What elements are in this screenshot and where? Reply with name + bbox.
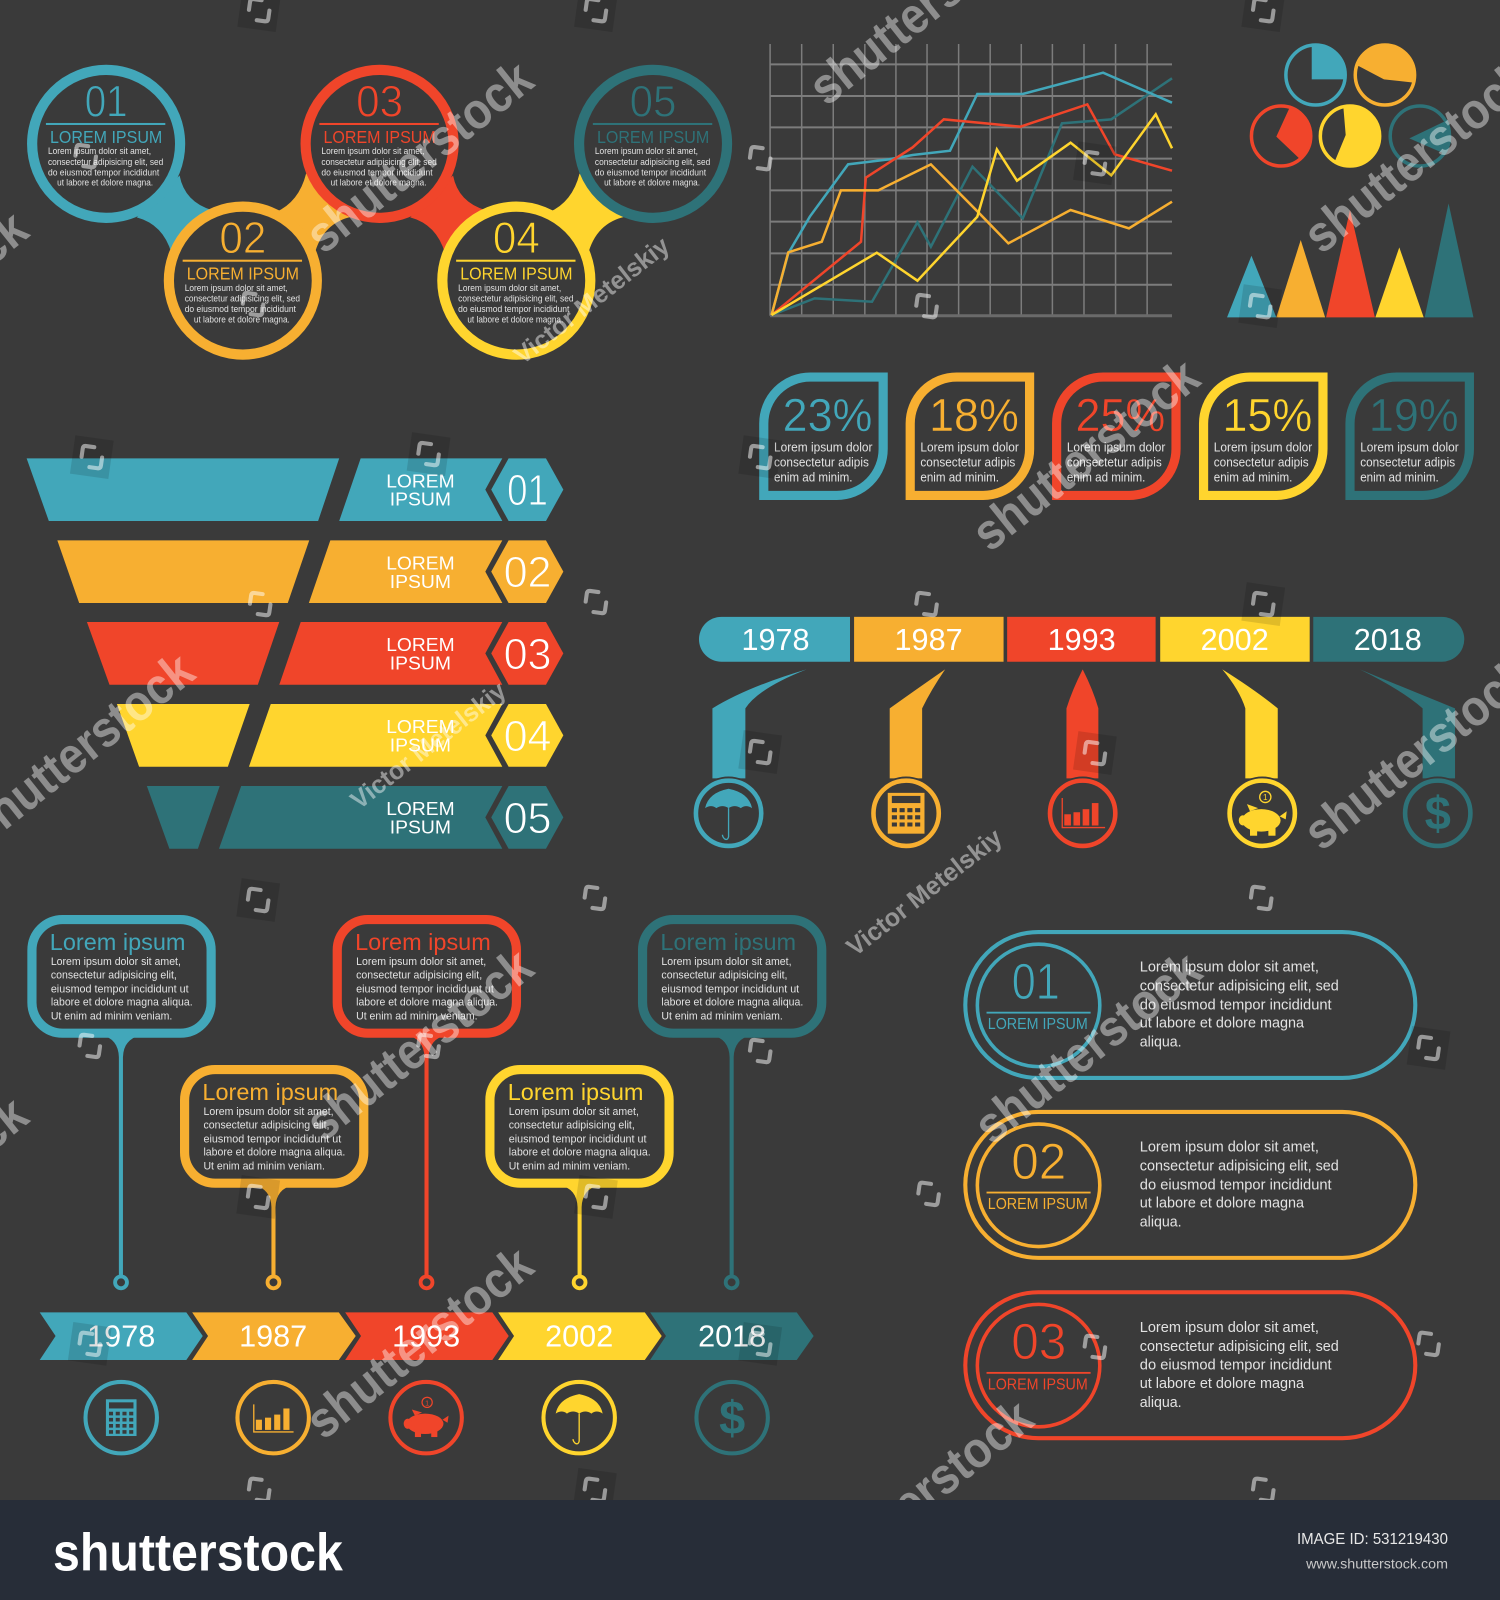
callout 3: consectetur adipisicing elit, (356, 970, 482, 982)
callout 3: labore et dolore magna aliqua. (356, 997, 498, 1009)
circle 05: consectetur adipisicing elit, sed (595, 157, 710, 167)
icon: calculator (86, 1382, 157, 1453)
leaf 23%: enim ad minim. (774, 470, 853, 485)
icon: umbrella (543, 1382, 615, 1453)
funnel row 05: 05 (504, 794, 552, 843)
circle 04 (442, 207, 590, 355)
circle 05 (579, 70, 727, 218)
callout 5: consectetur adipisicing elit, (661, 970, 787, 982)
leaf 19% (1350, 377, 1469, 495)
panel: year bar timeline (692, 617, 1474, 850)
leaf 25%: 25% (1076, 389, 1165, 441)
icon: umbrella (692, 777, 765, 850)
chevron years: 1978 (87, 1320, 155, 1354)
circle 02: 02 (219, 212, 266, 263)
callout 2: Lorem ipsum dolor sit amet, (203, 1106, 334, 1118)
icon: dollar: $ (1425, 788, 1451, 840)
year bar: 1993 (1048, 623, 1116, 657)
pie: teal (1286, 45, 1346, 105)
series: red (772, 104, 1172, 315)
connector: teal blob (137, 176, 212, 253)
circle 02: LOREM IPSUM (187, 264, 299, 284)
pill 02: 02 (1011, 1133, 1066, 1190)
year bar: 2002 (1201, 623, 1269, 657)
icon: dollar (696, 1382, 768, 1453)
callout 1: Ut enim ad minim veniam. (51, 1010, 172, 1022)
year bar: 1987 (895, 623, 963, 657)
pill 03: consectetur adipisicing elit, sed (1140, 1339, 1339, 1355)
callout 1: eiusmod tempor incididunt ut (51, 983, 189, 995)
triangle chart (1227, 203, 1473, 317)
icon: piggy bank (1226, 777, 1299, 850)
watermark text: shutterstock (795, 1388, 1044, 1600)
funnel row 01: IPSUM (390, 489, 451, 510)
circle 04: do eiusmod tempor incididunt (458, 304, 570, 314)
chevron years: 1993 (392, 1320, 460, 1354)
leaf 15%: enim ad minim. (1214, 470, 1292, 485)
circle 05: 05 (630, 75, 677, 126)
callout 4: Ut enim ad minim veniam. (509, 1160, 630, 1172)
icon: calculator (869, 777, 943, 850)
watermark text: shutterstock (961, 347, 1210, 562)
callout 1 (32, 920, 211, 1288)
arrows (712, 669, 1455, 778)
callout 4: consectetur adipisicing elit, (509, 1120, 635, 1132)
chevron years: 2018 (698, 1320, 766, 1354)
circle 02: Lorem ipsum dolor sit amet, (185, 283, 288, 293)
leaf 25%: enim ad minim. (1067, 470, 1145, 485)
leaf 18%: 18% (929, 389, 1019, 441)
circle 01: ut labore et dolore magna. (57, 178, 153, 188)
watermark text: Victor Metelskiy (509, 231, 676, 370)
circle 05: do eiusmod tempor incididunt (595, 168, 707, 178)
pie: dark teal (1390, 106, 1451, 166)
callout 5: Lorem ipsum dolor sit amet, (661, 956, 792, 968)
circle 02 (169, 207, 317, 355)
circle 04: 04 (493, 212, 540, 263)
leaf 19%: consectetur adipis (1360, 455, 1455, 470)
leaf 18% (910, 377, 1030, 495)
series: yellow (772, 114, 1172, 315)
callout 1: consectetur adipisicing elit, (51, 970, 177, 982)
funnel row 03 (87, 622, 563, 685)
circle 02: do eiusmod tempor incididunt (185, 304, 296, 314)
circle 03: do eiusmod tempor incididunt (321, 168, 433, 178)
chevrons (40, 1312, 814, 1360)
leaf 18%: enim ad minim. (920, 470, 999, 485)
line chart (770, 44, 1172, 316)
pill 03: ut labore et dolore magna (1140, 1376, 1305, 1392)
callout 5 (643, 920, 822, 1288)
callout 1: Lorem ipsum dolor sit amet, (51, 956, 181, 968)
leaf 25%: Lorem ipsum dolor (1067, 440, 1166, 455)
callout 2: consectetur adipisicing elit, (203, 1120, 329, 1132)
pie charts (1251, 44, 1451, 166)
watermark text: shutterstock (295, 937, 544, 1151)
pill 03: 03 (1011, 1313, 1066, 1370)
series: teal (772, 73, 1172, 315)
callout 2: Lorem ipsum (202, 1079, 338, 1105)
icon: piggy bank (390, 1382, 462, 1453)
chevron years (87, 1320, 766, 1354)
circle 05: ut labore et dolore magna. (604, 178, 700, 188)
leaf 18%: consectetur adipis (920, 455, 1015, 470)
pill 01 (965, 932, 1415, 1078)
leaf 19%: enim ad minim. (1360, 470, 1439, 485)
watermark text: shutterstock (963, 940, 1212, 1155)
funnel row 03: LOREM (386, 634, 455, 655)
pill 03: Lorem ipsum dolor sit amet, (1140, 1320, 1319, 1336)
callout 1: Lorem ipsum (50, 929, 186, 955)
callout 5: Lorem ipsum (660, 929, 796, 955)
panel: chevron timeline (40, 1312, 814, 1453)
callout 3: Lorem ipsum (355, 929, 491, 955)
circle 02: ut labore et dolore magna. (194, 314, 290, 324)
funnel row 05: LOREM (386, 798, 455, 819)
panel: funnel (27, 458, 563, 849)
leaf 15%: 15% (1222, 389, 1312, 441)
pill 01: consectetur adipisicing elit, sed (1140, 979, 1339, 995)
connector: orange blob (276, 173, 353, 255)
panel: linked circles (32, 70, 727, 355)
callout 5: Ut enim ad minim veniam. (661, 1010, 783, 1022)
icon: dollar: $ (719, 1392, 745, 1444)
chevron years: 2002 (545, 1320, 613, 1354)
callout 5: labore et dolore magna aliqua. (661, 997, 803, 1009)
circle 03: Lorem ipsum dolor sit amet, (321, 146, 424, 156)
callout 2: labore et dolore magna aliqua. (203, 1147, 345, 1159)
funnel row 04 (117, 704, 563, 767)
leaf 15%: consectetur adipis (1214, 455, 1309, 470)
panel: callout timeline (32, 920, 822, 1288)
funnel row 02: IPSUM (390, 571, 451, 592)
callout 3 (337, 920, 516, 1288)
circle 03: 03 (356, 75, 403, 126)
callout 2: eiusmod tempor incididunt ut (203, 1133, 342, 1145)
circle 02: consectetur adipisicing elit, sed (185, 294, 300, 304)
callout 4 (490, 1070, 669, 1288)
funnel row 01: 01 (507, 466, 548, 515)
footer bar (0, 1500, 1500, 1600)
callout 4: labore et dolore magna aliqua. (509, 1147, 651, 1159)
funnel row 04: LOREM (386, 716, 455, 737)
leaf 25%: consectetur adipis (1067, 455, 1162, 470)
pill 02: aliqua. (1140, 1215, 1182, 1231)
connector: red blob (410, 176, 486, 253)
circle 01: consectetur adipisicing elit, sed (48, 157, 163, 167)
footer url: www.shutterstock.com (1305, 1556, 1448, 1572)
chevron years: 1987 (239, 1320, 307, 1354)
watermark text: Victor Metelskiy (346, 676, 512, 815)
icon: dollar (1401, 777, 1474, 850)
footer image id: IMAGE ID: 531219430 (1297, 1531, 1448, 1548)
icon: bar chart (1046, 777, 1119, 850)
leaf 19%: Lorem ipsum dolor (1360, 440, 1459, 455)
funnel row 02 (57, 540, 563, 603)
pill 02: ut labore et dolore magna (1140, 1195, 1305, 1211)
pill 02 (965, 1112, 1415, 1258)
callout 3: eiusmod tempor incididunt ut (356, 983, 495, 995)
pill 02: LOREM IPSUM (988, 1196, 1088, 1213)
circle 05: LOREM IPSUM (597, 127, 709, 147)
circle 04: LOREM IPSUM (460, 264, 572, 284)
funnel row 03: IPSUM (390, 652, 451, 673)
circle 01: 01 (85, 75, 128, 126)
icon: bar chart (237, 1382, 309, 1453)
callout 2 (185, 1070, 364, 1288)
watermark text: shutterstock (295, 1235, 544, 1449)
pie: red (1251, 106, 1311, 166)
callout 4: eiusmod tempor incididunt ut (509, 1133, 647, 1145)
circle 01 (32, 70, 180, 218)
funnel row 05: IPSUM (390, 816, 451, 837)
pill 03 (965, 1292, 1415, 1438)
pill 01: do eiusmod tempor incididunt (1140, 997, 1332, 1013)
funnel row 02: LOREM (386, 552, 455, 573)
callout 2: Ut enim ad minim veniam. (203, 1160, 325, 1172)
callout 5: eiusmod tempor incididunt ut (661, 983, 800, 995)
year bar: 2018 (1354, 623, 1422, 657)
funnel row 01: LOREM (386, 470, 455, 491)
year bar (699, 617, 1464, 662)
leaf 23%: consectetur adipis (774, 455, 869, 470)
circle 04: consectetur adipisicing elit, sed (458, 294, 573, 304)
callout 4: Lorem ipsum (508, 1079, 643, 1105)
pill 03: aliqua. (1140, 1395, 1182, 1411)
circle 01: do eiusmod tempor incididunt (48, 168, 160, 178)
pill 02: Lorem ipsum dolor sit amet, (1140, 1140, 1319, 1156)
connector: yellow blob (549, 173, 627, 255)
circle 03: ut labore et dolore magna. (331, 178, 427, 188)
pill 03: do eiusmod tempor incididunt (1140, 1358, 1332, 1374)
leaf 15% (1204, 377, 1323, 495)
circle 05: Lorem ipsum dolor sit amet, (595, 146, 698, 156)
funnel row 05 (147, 786, 563, 849)
pill 03: LOREM IPSUM (988, 1376, 1088, 1393)
series: dark teal (772, 78, 1172, 315)
pill 02: consectetur adipisicing elit, sed (1140, 1159, 1339, 1175)
callout 3: Lorem ipsum dolor sit amet, (356, 956, 486, 968)
pill 01: 01 (1012, 953, 1060, 1010)
circle 03: consectetur adipisicing elit, sed (321, 157, 437, 167)
funnel row 03: 03 (504, 630, 552, 679)
leaf 23%: 23% (783, 389, 872, 441)
year bar: 1978 (741, 623, 810, 657)
circle 04: Lorem ipsum dolor sit amet, (458, 283, 561, 293)
circle 01: LOREM IPSUM (50, 127, 162, 147)
leaf 25% (1057, 377, 1176, 495)
pill 02: do eiusmod tempor incididunt (1140, 1177, 1332, 1193)
panel: pill list (965, 932, 1415, 1438)
circle 01: Lorem ipsum dolor sit amet, (48, 146, 151, 156)
watermark text: shutterstock (295, 49, 544, 264)
pie: orange (1355, 44, 1415, 105)
circle 04: ut labore et dolore magna. (467, 314, 563, 324)
icon: piggy bank: 1 (425, 1399, 429, 1407)
pill 01: LOREM IPSUM (988, 1016, 1088, 1033)
footer logo: shutterstock (53, 1523, 343, 1582)
funnel row 01 (27, 458, 563, 521)
series: orange (772, 164, 1172, 315)
callout 1: labore et dolore magna aliqua. (51, 997, 193, 1009)
icon: piggy bank: 1 (1263, 793, 1268, 802)
pill 01: Lorem ipsum dolor sit amet, (1140, 960, 1319, 976)
circle 03 (306, 70, 454, 218)
pie: yellow (1320, 106, 1380, 166)
pill 01: aliqua. (1140, 1035, 1182, 1051)
pill 01: ut labore et dolore magna (1140, 1016, 1305, 1032)
panel: percentage leaves (764, 377, 1469, 495)
circle 03: LOREM IPSUM (323, 127, 436, 147)
leaf 15%: Lorem ipsum dolor (1214, 440, 1313, 455)
funnel row 02: 02 (504, 548, 552, 597)
leaf 23%: Lorem ipsum dolor (774, 440, 873, 455)
callout 4: Lorem ipsum dolor sit amet, (509, 1106, 639, 1118)
leaf 18%: Lorem ipsum dolor (920, 440, 1020, 455)
leaf 23% (764, 377, 883, 495)
leaf 19%: 19% (1369, 389, 1459, 441)
watermark text: Victor Metelskiy (842, 823, 1008, 962)
funnel row 04: 04 (504, 712, 552, 761)
callout 3: Ut enim ad minim veniam. (356, 1010, 478, 1022)
funnel row 04: IPSUM (390, 735, 451, 756)
